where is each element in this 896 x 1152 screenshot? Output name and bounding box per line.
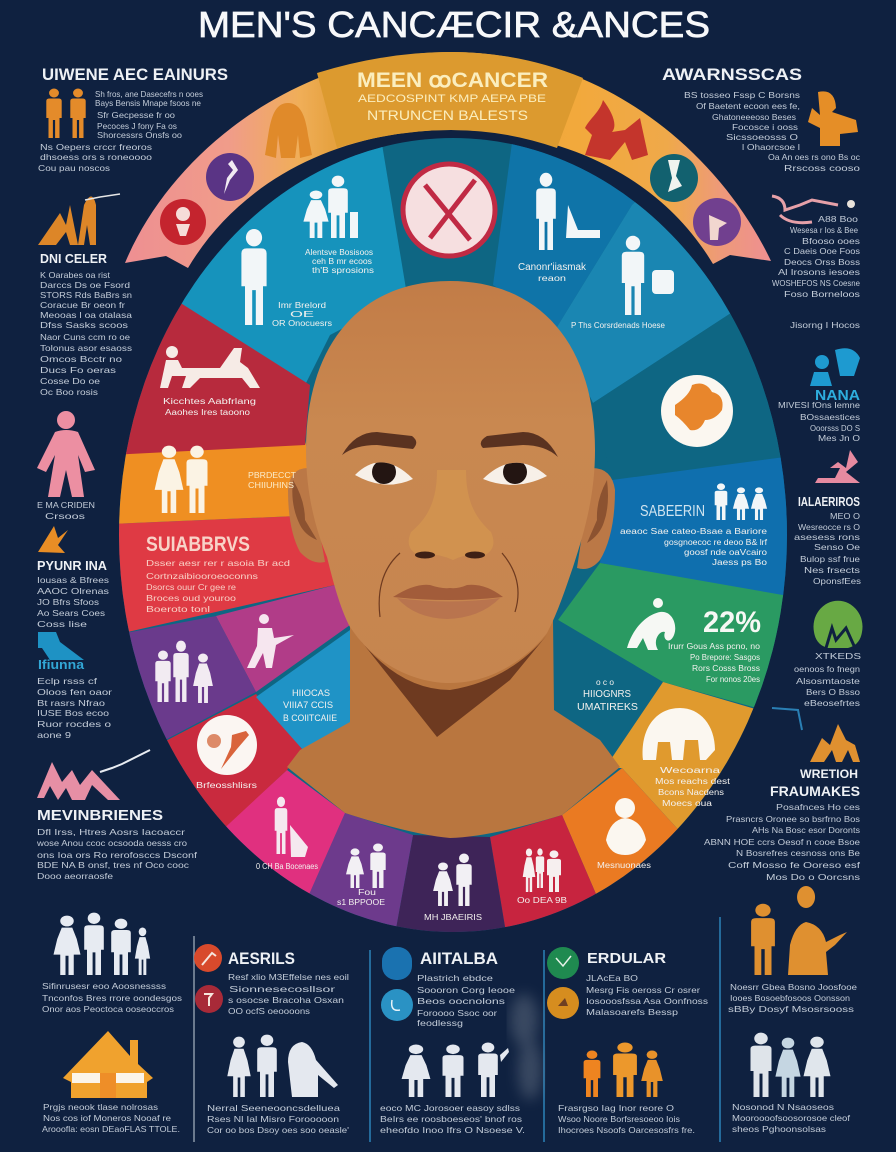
icon: patient with device xyxy=(622,236,674,315)
text: Ns Oepers crccr freoros xyxy=(40,142,152,152)
icon: orange house xyxy=(63,1031,153,1098)
neck shadow xyxy=(350,627,547,737)
text: Al Irosons iesoes xyxy=(778,267,860,277)
text: coral xyxy=(146,558,290,614)
text: Arooofla: eosn DEaoFLAS TTOLE. xyxy=(42,1124,180,1134)
text: BDE NA B onsf, tres nf Oco cooc xyxy=(37,860,190,870)
icon: banner orange figure xyxy=(265,103,312,158)
text: saberri xyxy=(620,527,768,567)
line: blue connector xyxy=(772,708,802,730)
text: Naor Cuns ccm ro oe xyxy=(40,332,130,342)
text: Wesreocce rs O xyxy=(798,522,860,532)
text: green: Rors Cosss Bross xyxy=(692,664,760,673)
text xyxy=(207,1103,349,1135)
text xyxy=(38,89,203,173)
label: purple xyxy=(337,888,385,907)
left column: top block xyxy=(38,65,228,173)
heading: PYUNR INA xyxy=(37,558,108,573)
text: Cor oo bos Dsoy oes soo oeasle' xyxy=(207,1125,349,1135)
heading: AWARNSSCAS xyxy=(662,65,802,84)
text: Pecoces J fony Fa os xyxy=(97,121,177,131)
text: Rses Nl Ial Misro Forooooon xyxy=(207,1114,339,1124)
label: purple: s1 BPPOOE xyxy=(337,898,385,907)
text: asesess rons xyxy=(794,532,860,542)
text: Shorcessrs Onsfs oo xyxy=(97,130,182,140)
label: man: Imr Brelord xyxy=(278,301,326,310)
text: couple: PBRDECCT xyxy=(248,471,296,480)
text: red segment: Aaohes Ires taoono xyxy=(165,408,251,417)
icon: family top xyxy=(303,176,358,238)
text: Coff Mosso fe Ooreso esf xyxy=(728,860,861,870)
text: elephant xyxy=(655,766,731,808)
icon: banner purple circle right xyxy=(693,198,741,246)
icon: red segment figure xyxy=(160,346,260,388)
face xyxy=(306,281,595,683)
smile lines xyxy=(379,553,518,617)
text: Sfr Gecpesse fr oo xyxy=(97,110,175,120)
text: Meooas l oa otalasa xyxy=(40,310,132,320)
bottom column 2 xyxy=(194,944,349,1135)
text: BOssaestices xyxy=(800,412,860,422)
text xyxy=(417,973,515,1028)
text: oenoos fo fnegn xyxy=(794,664,860,674)
right column: blue block xyxy=(778,348,860,443)
text: Ghatoneeeoso Beses xyxy=(712,112,796,122)
text: coral: Boeroto tonl xyxy=(146,604,210,614)
text: Bays Bensis Mnape fsoos ne xyxy=(95,98,201,108)
icon: orange group xyxy=(810,724,860,762)
label: teal xyxy=(577,678,638,713)
text: Foroooo Ssoc oor xyxy=(417,1008,497,1018)
text xyxy=(704,802,861,882)
text: Omcos Bcctr no xyxy=(40,354,122,364)
icon: pink figure xyxy=(37,411,95,497)
text: green: Po Brepore: Sasgos xyxy=(690,653,760,662)
text: Mooroooofsoosorosoe cleof xyxy=(732,1113,851,1123)
icon: couple xyxy=(155,446,208,513)
icon: red crossed tools in circle xyxy=(403,164,495,256)
text xyxy=(794,664,860,708)
text: Mes Jn O xyxy=(818,433,860,443)
bottom column 1 xyxy=(42,913,182,1134)
label: light blue: VIIIA7 CCIS xyxy=(283,700,333,710)
stat: percent: 22% xyxy=(703,606,761,639)
text: coral: Cortnzaibiooroeoconns xyxy=(146,571,258,581)
label: family: th'B sprosions xyxy=(312,266,374,275)
text: Deocs Orss Boss xyxy=(784,257,860,267)
text xyxy=(586,973,708,1017)
wheel base xyxy=(110,130,800,940)
text: green: For nonos 20es xyxy=(706,675,760,684)
text: Oa An oes rs ono Bs oc xyxy=(768,152,861,162)
icon: magenta figure xyxy=(247,614,294,668)
left column: second block xyxy=(38,194,132,397)
text xyxy=(380,1103,525,1135)
label: purple: Fou xyxy=(358,888,376,897)
label: orange segment: Mesnuonaes xyxy=(597,861,651,870)
text: Nos cos iof Moneros Nooaf re xyxy=(43,1113,171,1123)
text: saberri: goosf nde oaVcairo xyxy=(684,548,768,557)
text: Bfooso ooes xyxy=(802,236,860,246)
label: family: ceh B mr ecoos xyxy=(312,257,372,266)
text: eheofdo Inoo Ifrs O Nsoese V. xyxy=(380,1125,525,1135)
label: chair: reaon xyxy=(538,274,566,283)
icon: pink squiggle xyxy=(772,196,838,223)
bottom dividers xyxy=(194,917,720,1142)
heading: coral: SUIABBRVS xyxy=(146,533,250,556)
text: l Ohaorcsoe l xyxy=(742,142,800,152)
text: Frasrgso Iag Inor reore O xyxy=(558,1103,674,1113)
label: chair: Canonr'iiasmak xyxy=(518,262,587,273)
text: Soooron Corg Ieooe xyxy=(417,985,515,995)
bottom column 5 xyxy=(728,886,857,1134)
arched banner xyxy=(125,52,771,268)
text: OO ocfS oeoooons xyxy=(228,1006,310,1016)
text xyxy=(40,270,132,397)
text: Rrscoss cooso xyxy=(784,163,860,173)
text: aone 9 xyxy=(37,730,71,740)
text: Sh fros, ane Dasecefrs n ooes xyxy=(95,89,203,99)
icon: white group xyxy=(402,1043,509,1097)
text: Oc Boo rosis xyxy=(40,387,98,397)
icon: blue blob xyxy=(382,947,412,980)
neck and shoulders xyxy=(287,620,620,838)
icon: pink figure xyxy=(275,797,308,857)
text: elephant: Wecoarna xyxy=(660,766,721,775)
text: Malasoarefs Bessp xyxy=(586,1007,678,1017)
text: eoco MC Jorosoer easoy sdlss xyxy=(380,1103,520,1113)
label: man xyxy=(272,301,332,328)
text: Ihocroes Nsoofs Oarcesosfrs fre. xyxy=(558,1125,695,1135)
text: BeIrs ee roosboeseos' bnof ros xyxy=(380,1114,522,1124)
text: JLAcEa BO xyxy=(586,973,638,983)
icon: dark red circle xyxy=(195,985,223,1013)
label: light blue: B COIITCAIIE xyxy=(283,713,337,723)
text: Resf xlio M3Effelse nes eoil xyxy=(228,972,349,982)
text: wose Anou ccoc ocsooda oesss cro xyxy=(36,838,187,848)
text: coral: Dsser aesr rer r asoia Br acd xyxy=(146,558,290,568)
icon: blue small xyxy=(38,632,84,660)
text: elephant: Moecs oua xyxy=(662,799,713,808)
text: Crsoos xyxy=(45,511,85,521)
text: Onor aos Peoctoca ooseoccros xyxy=(42,1004,174,1014)
label: man: OE xyxy=(290,310,314,319)
text xyxy=(37,500,95,521)
icon: elephant xyxy=(643,708,715,760)
label: bird: Brfeosshlisrs xyxy=(196,781,257,790)
text: Foso Borneloos xyxy=(784,289,860,299)
text: OponsfEes xyxy=(813,576,861,586)
text: Prasncrs Oronee so bsrfrno Bos xyxy=(726,814,860,824)
text: Oloos fen oaor xyxy=(37,687,112,697)
bottom column 3 xyxy=(380,947,542,1135)
icon: white family xyxy=(54,913,150,975)
left eye xyxy=(355,462,413,485)
text xyxy=(36,827,198,881)
text: Iousas & Bfrees xyxy=(37,575,109,585)
text: Nerral Seeneooncsdelluea xyxy=(207,1103,340,1113)
text: Coss lise xyxy=(37,619,87,629)
label: chair xyxy=(518,262,587,283)
text: Coracue Br oeon fr xyxy=(40,300,125,310)
text xyxy=(228,972,349,1016)
text: E MA CRIDEN xyxy=(37,500,95,510)
text: Noesrr Gbea Bosno Joosfooe xyxy=(730,982,857,992)
label: pink: 0 CH Ba Bocenaes xyxy=(256,862,318,871)
text: Plastrich ebdce xyxy=(417,973,493,983)
text: coral: Dsorcs ouur Cr gee re xyxy=(146,582,236,592)
text: Ao Sears Coes xyxy=(37,608,105,618)
text: Darccs Ds oe Fsord xyxy=(40,280,130,290)
text: C Daeis Ooe Foos xyxy=(784,246,860,256)
text xyxy=(42,981,182,1014)
icon: green circle xyxy=(547,947,579,979)
title: MEN'S CANCÆCIR &ANCES xyxy=(198,4,710,45)
text: Sifinrusesr eoo Aoosnessss xyxy=(42,981,166,991)
icon: pink figures xyxy=(37,762,120,800)
text: Ooorsss DO S xyxy=(810,423,860,433)
nose xyxy=(409,470,493,560)
text: feodlessg xyxy=(417,1018,463,1028)
icon: banner purple circle xyxy=(206,153,254,201)
text: Posafnces Ho ces xyxy=(776,802,860,812)
heading: IALAERIROS xyxy=(798,494,860,509)
icon: gold circle xyxy=(547,987,579,1019)
line: arrow xyxy=(100,750,150,772)
label: crimson segment: Oo DEA 9B xyxy=(517,896,567,905)
text: Alsosmtaoste xyxy=(796,676,860,686)
text: green xyxy=(668,642,761,684)
icon: pink figure xyxy=(815,450,860,483)
text: Tnconfos Bres rrore oondesgos xyxy=(42,993,182,1003)
text xyxy=(794,511,861,586)
label: light blue: HIIOCAS xyxy=(292,688,330,698)
heading: AESRILS xyxy=(228,949,295,968)
text: Sicssoeosss O xyxy=(726,132,798,142)
text: Senso Oe xyxy=(814,542,860,552)
right column: top block xyxy=(662,65,861,173)
heading: WRETIOH xyxy=(800,767,858,781)
banner subheading: AEDCOSPINT KMP AEPA PBE xyxy=(358,93,546,105)
mouth xyxy=(393,585,503,619)
label: teal: HIIOGNRS xyxy=(583,689,631,700)
icon: white group xyxy=(750,1033,830,1097)
icon: saberri people xyxy=(715,483,767,520)
text xyxy=(37,575,109,629)
icon: green circle xyxy=(814,601,862,648)
text: red segment xyxy=(163,397,256,417)
heading: NANA xyxy=(815,387,860,404)
text: Iosooosfssa Asa Oonfnoss xyxy=(586,996,708,1006)
icon: patient with chair xyxy=(536,173,600,250)
head illustration xyxy=(287,281,620,838)
label: light blue xyxy=(283,688,337,723)
heading: DNI CELER xyxy=(40,251,108,266)
left eyebrow xyxy=(342,432,416,455)
text: Jisorng I Hocos xyxy=(790,320,860,330)
icon: two orange people xyxy=(46,88,86,138)
banner arc xyxy=(125,52,771,268)
label: device: P Ths Corsrdenads Hoese xyxy=(571,321,666,330)
banner centre panel xyxy=(317,52,583,148)
banner heading: MEEN ꝏCANCER xyxy=(357,69,548,92)
text: green: Irurr Gous Ass pcno, no xyxy=(668,642,761,651)
icon: orange small xyxy=(38,526,68,553)
right column: pink block xyxy=(794,450,861,586)
text: saberri: gosgnoecoc re deoo B& lrf xyxy=(664,538,768,547)
right column: bottom block xyxy=(704,708,861,882)
text: eBeosefrtes xyxy=(804,698,860,708)
text: Tolonus asor esaoss xyxy=(40,343,132,353)
icon: orange people xyxy=(751,886,847,975)
text: sheos Pghoonsolsas xyxy=(732,1124,826,1134)
text: sBBy Dosyf Msosrsooss xyxy=(728,1004,854,1014)
icon: purple people xyxy=(346,843,386,888)
icon: banner red figure xyxy=(585,100,648,160)
text: A88 Boo xyxy=(818,214,858,224)
text: Cou pau noscos xyxy=(38,163,110,173)
right eyebrow xyxy=(481,432,558,457)
wheel xyxy=(110,120,800,945)
right column: green block xyxy=(794,601,862,708)
text: Bt rasrs Nfrao xyxy=(37,698,105,708)
text: STORS Rds BaBrs sn xyxy=(40,290,132,300)
text: Prgjs neook tlase nolrosas xyxy=(43,1102,158,1112)
text: s osocse Bracoha Osxan xyxy=(228,995,344,1005)
text: Beos oocnolons xyxy=(417,996,505,1006)
text: Wsoo Noore Borfsresoeoo Iois xyxy=(558,1114,680,1124)
text: Sionnesecosllsor xyxy=(229,984,335,994)
icon: orange group xyxy=(38,194,120,245)
text: ons Ioa ors Ro rerofosccs Dsconf xyxy=(37,850,198,860)
text xyxy=(778,400,860,443)
text xyxy=(772,214,860,330)
label: man: OR Onocuesrs xyxy=(272,319,332,328)
icon: light blue circle xyxy=(381,989,413,1021)
text: Ducs Fo oeras xyxy=(40,365,116,375)
label: dark purple: MH JBAEIRIS xyxy=(424,913,482,922)
text xyxy=(558,1103,695,1135)
text: couple xyxy=(248,471,296,490)
text: Mos Do o Oorcsns xyxy=(766,872,860,882)
right eye xyxy=(483,462,547,485)
text: elephant: Bcons Nacdens xyxy=(658,788,724,797)
text: Mesrg Fis oeross Cr osrer xyxy=(586,985,700,995)
heading: AIITALBA xyxy=(420,949,498,968)
label: family xyxy=(305,248,374,275)
label: family: Alentsve Bosisoos xyxy=(305,248,373,257)
text: Bulop ssf frue xyxy=(800,554,860,564)
text: IUSE Bos ecoo xyxy=(37,708,109,718)
right column: bottom block: FRAUMAKES xyxy=(770,783,860,799)
text: elephant: Mos reachs dest xyxy=(655,777,731,786)
text: Iooes Bosoebfosoos Oonsson xyxy=(730,993,850,1003)
label: teal: o c o xyxy=(596,678,615,687)
wheel icons and labels xyxy=(146,164,768,922)
text: JO Bfrs Sfoos xyxy=(37,597,99,607)
smoke xyxy=(510,994,542,1100)
text xyxy=(684,90,861,173)
text: WOSHEFOS NS Coesne xyxy=(772,278,860,288)
text: MIVESI fOns Iemne xyxy=(778,400,860,410)
icon: banner teal circle xyxy=(650,154,698,202)
text: Dooo aeorraosfe xyxy=(37,871,113,881)
text: Dfss Sasks scoos xyxy=(40,320,128,330)
icon: dark purple people xyxy=(433,854,472,906)
segments xyxy=(182,147,406,382)
text: N Bosrefres cesnoss ons Be xyxy=(736,848,860,858)
left column: pink figure block xyxy=(37,411,112,740)
text xyxy=(42,1102,180,1134)
icon: crimson segment people xyxy=(523,848,561,892)
heading: ERDULAR xyxy=(587,950,666,967)
label: teal: UMATIREKS xyxy=(577,702,638,713)
label: saberri: SABEERIN xyxy=(640,503,705,520)
text: K Oarabes oa rist xyxy=(40,270,111,280)
arched banner: NTRUNCEN BALESTS xyxy=(367,107,528,123)
text: saberri: Jaess ps Bo xyxy=(712,558,768,567)
text: AAOC Olrenas xyxy=(37,586,109,596)
text: ABNN HOE ccrs Oesof n cooe Bsoe xyxy=(704,837,860,847)
text: red segment: Kicchtes Aabfrlang xyxy=(163,397,256,406)
text: Nes frsects xyxy=(804,565,860,575)
text: Nosonod N Nsaoseos xyxy=(732,1102,834,1112)
text: BS tosseo Fssp C Borsns xyxy=(684,90,800,100)
text: Wesesa r Ios & Bee xyxy=(790,225,858,235)
heading: XTKEDS xyxy=(815,651,861,661)
text: saberri: aeaoc Sae cateo-Bsae a Bariore xyxy=(620,527,768,536)
text: Ruor rocdes o xyxy=(37,719,111,729)
icon: white group xyxy=(227,1035,338,1097)
text: Of Baetent ecoon ees fe, xyxy=(696,101,800,111)
icon: orange group xyxy=(584,1043,663,1097)
heading: UIWENE AEC EAINURS xyxy=(42,65,228,84)
text: Eclp rsss cf xyxy=(37,676,98,686)
icon: bird circle xyxy=(197,715,257,775)
right ear xyxy=(577,468,615,569)
text: AHs Na Bosc esor Doronts xyxy=(752,825,860,835)
right column: second block xyxy=(772,196,860,330)
icon: man xyxy=(241,229,267,325)
icon: purple people left xyxy=(155,641,213,703)
bottom column 4 xyxy=(547,947,708,1135)
text xyxy=(732,1102,851,1134)
icon: banner red circle xyxy=(160,199,206,245)
icon: orange-red circle xyxy=(194,944,222,972)
heading: MEVINBRIENES xyxy=(37,807,163,824)
text: coral: Broces oud youroo xyxy=(146,593,236,603)
text: couple: CHIIUHINS xyxy=(248,481,294,490)
text: Dfl Irss, Htres Aosrs Iacoaccr xyxy=(37,827,185,837)
icon: orange organ circle xyxy=(661,375,733,447)
heading: Ifiunna xyxy=(38,657,85,672)
text: Focosce i ooss xyxy=(732,122,798,132)
text: Cosse Do oe xyxy=(40,376,100,386)
left column: bottom block xyxy=(36,750,198,881)
icon: green section figure xyxy=(627,598,675,650)
icon: orange segment figure xyxy=(606,798,646,855)
text: dhsoess ors s roneoooo xyxy=(40,152,152,162)
left ear xyxy=(288,468,325,563)
text xyxy=(37,676,112,740)
text xyxy=(728,982,857,1014)
icon: orange figure xyxy=(808,91,858,146)
icon: blue figures xyxy=(810,348,860,386)
text: Bers O Bsso xyxy=(806,687,860,697)
text: MEO O xyxy=(830,511,860,521)
